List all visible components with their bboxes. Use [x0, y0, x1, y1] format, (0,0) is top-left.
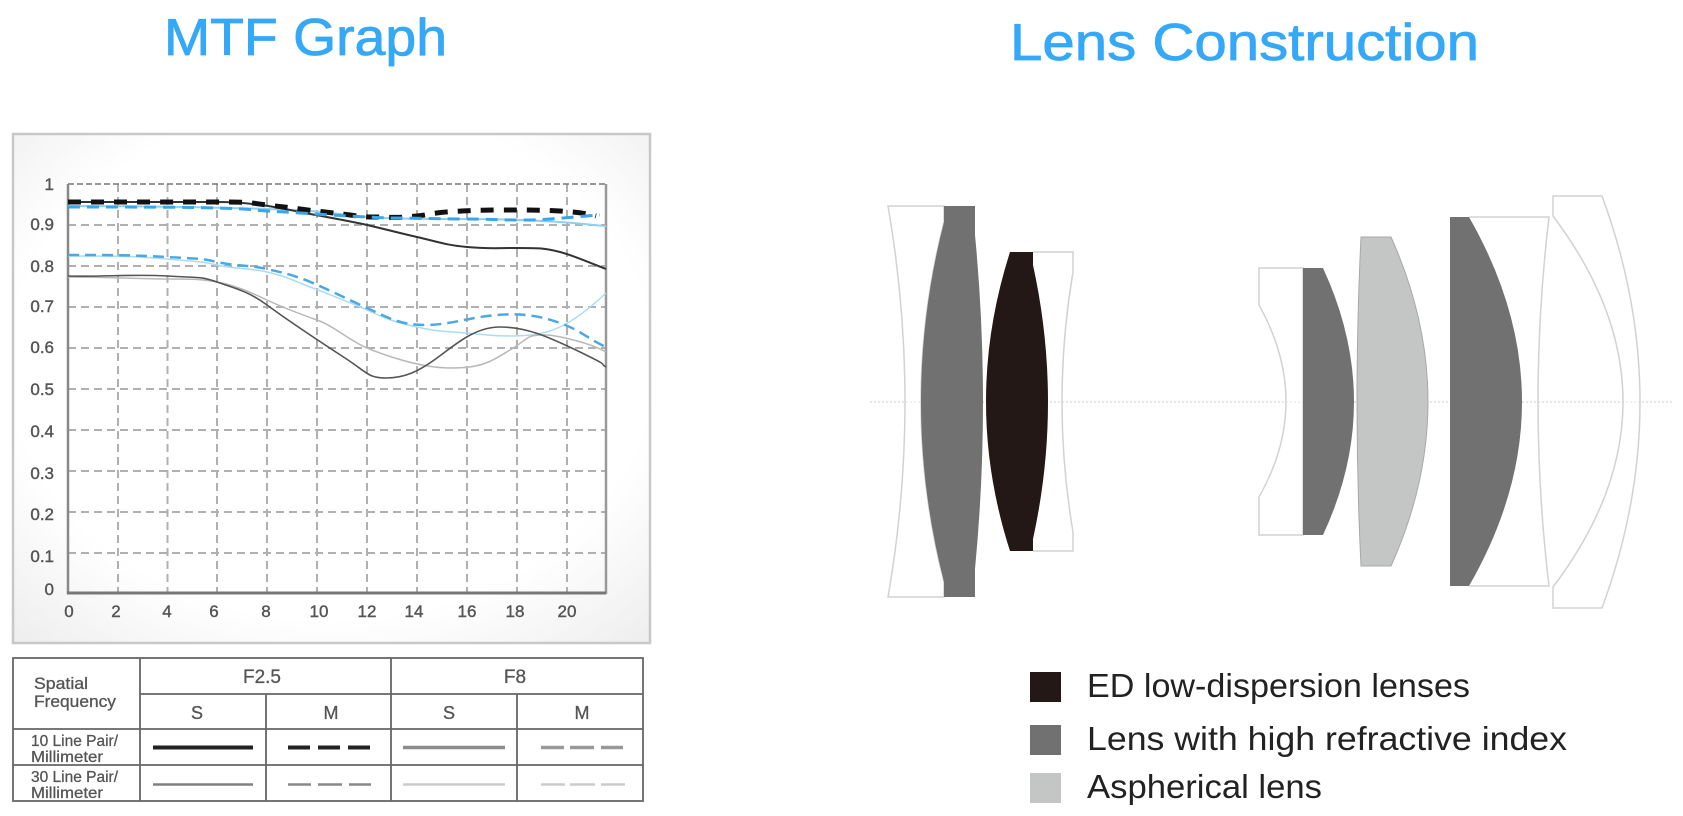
x axis labels: 2 — [111, 602, 121, 621]
y axis labels: 0.8 — [30, 257, 54, 276]
lens 2: high refractive grey — [921, 206, 983, 597]
lens 6: high refractive grey — [1303, 268, 1354, 535]
lens 3: ED black — [986, 252, 1048, 551]
x axis labels: 20 — [558, 602, 576, 621]
header: spatial frequency: Spatial — [34, 675, 88, 693]
chart grid — [68, 184, 606, 594]
swatch: aspherical — [1030, 773, 1061, 803]
lens 8: high refractive grey — [1450, 217, 1522, 586]
y axis labels: 1 — [45, 175, 54, 194]
x axis labels: 10 — [310, 602, 328, 621]
lens 10: white meniscus — [1553, 196, 1640, 608]
swatch: ED — [1030, 672, 1061, 702]
header: S and M: M — [574, 703, 590, 723]
label: ED: ED low-dispersion lenses — [1087, 667, 1470, 704]
y axis labels: 0.7 — [30, 297, 54, 316]
title: Lens Construction: Lens Construction — [1010, 14, 1479, 72]
legend: lens types — [1030, 667, 1568, 805]
swatch: high refractive — [1030, 725, 1061, 755]
y axis labels: 0.1 — [30, 547, 54, 566]
row labels — [31, 733, 119, 802]
x axis labels: 16 — [458, 602, 476, 621]
curve: 10 lp F2.5 solid black — [68, 202, 606, 269]
row labels: 10 Line Pair/ — [31, 733, 119, 750]
x axis labels — [64, 602, 576, 621]
curve: 30 lp F8 sagittal light blue — [68, 256, 606, 336]
lens 4: white concave — [1033, 252, 1073, 551]
y axis labels — [30, 175, 54, 599]
lens 9: white — [1469, 217, 1549, 586]
title: MTF Graph: MTF Graph — [164, 9, 447, 67]
x axis labels: 8 — [261, 602, 271, 621]
lens 7: aspherical light grey — [1357, 237, 1428, 566]
table grid — [13, 658, 643, 801]
label: high refractive: Lens with high refractive index — [1087, 720, 1568, 757]
curve: 10 lp F8 light blue — [68, 206, 606, 226]
y axis labels: 0.2 — [30, 505, 54, 524]
header: S and M: S — [443, 703, 455, 723]
y axis labels: 0.6 — [30, 338, 54, 357]
lens construction diagram — [870, 196, 1672, 608]
y axis labels: 0.9 — [30, 215, 54, 234]
row labels: Millimeter — [31, 749, 104, 766]
plot frame — [67, 184, 606, 594]
curve: 30 lp F2.5 blue dashed — [68, 255, 606, 347]
legend line samples — [153, 748, 625, 784]
curve: 10 lp F8 blue dashed — [68, 207, 600, 220]
y axis labels: 0.5 — [30, 380, 54, 399]
x axis labels: 6 — [209, 602, 219, 621]
lens 5: white meniscus — [1259, 268, 1303, 535]
header: apertures: F2.5 — [243, 667, 281, 688]
lens 1: white concave — [888, 206, 944, 597]
header: S and M: M — [324, 703, 338, 723]
x axis labels: 18 — [506, 602, 524, 621]
curve: 30 lp F8 sagittal grey — [68, 277, 606, 368]
curve: 10 lp F2.5 black thick dashed — [68, 202, 596, 217]
panel: MTF chart — [13, 134, 650, 643]
label: aspherical: Aspherical lens — [1087, 768, 1322, 805]
curve: 30 lp F2.5 meridional dotted dark — [68, 275, 606, 378]
header: spatial frequency — [34, 675, 117, 711]
y axis labels: 0.4 — [30, 422, 54, 441]
header: S and M: S — [191, 703, 203, 723]
y axis labels: 0 — [45, 580, 54, 599]
row labels: 30 Line Pair/ — [31, 769, 119, 786]
x axis labels: 14 — [405, 602, 423, 621]
y axis labels: 0.3 — [30, 464, 54, 483]
header: spatial frequency: Frequency — [34, 693, 117, 711]
header: apertures — [243, 667, 526, 688]
row labels: Millimeter — [31, 785, 104, 802]
x axis labels: 0 — [64, 602, 74, 621]
optical axis — [870, 401, 1672, 403]
legend table: spatial frequency — [13, 658, 643, 802]
x axis labels: 12 — [358, 602, 376, 621]
header: apertures: F8 — [504, 667, 526, 688]
x axis labels: 4 — [162, 602, 172, 621]
header: S and M — [191, 703, 590, 723]
